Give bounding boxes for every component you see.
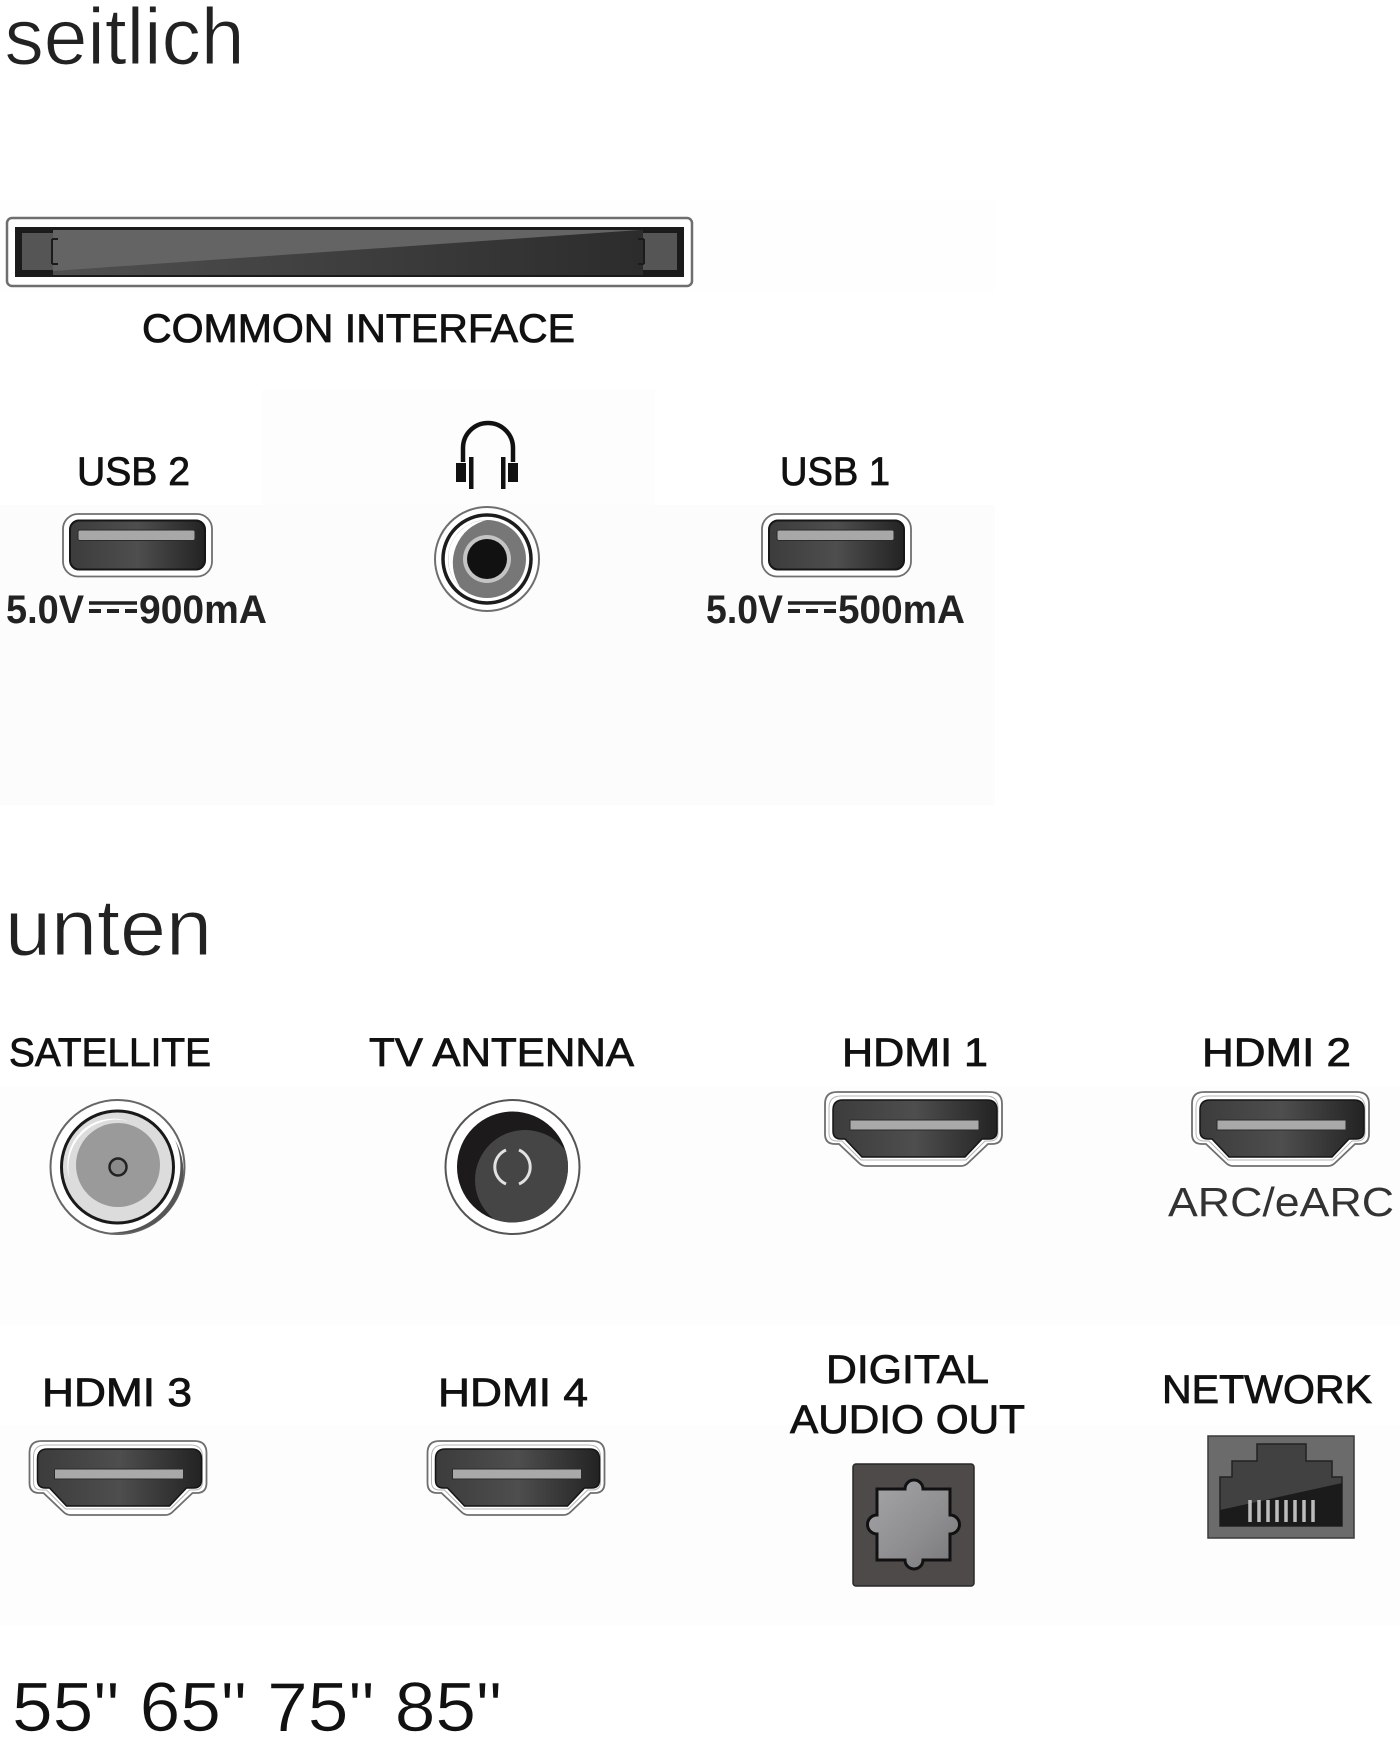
label: USB 1: USB 1 (780, 450, 890, 494)
icon: audio jack (435, 507, 539, 611)
label: HDMI 4: HDMI 4 (438, 1371, 588, 1415)
label: digital audio out: DIGITAL (826, 1348, 989, 1392)
panel: network (1162, 1368, 1372, 1538)
icon: common interface slot (7, 218, 692, 286)
label: HDMI 1: HDMI 1 (842, 1031, 988, 1075)
icon: satellite connector (50, 1100, 184, 1234)
icon: HDMI 2 port (1192, 1092, 1369, 1166)
label: USB 2 power rating (6, 588, 267, 632)
label: USB 1 power rating (706, 588, 965, 632)
heading: unten: unten (5, 883, 212, 972)
label: USB 1 power rating: 500mA (838, 588, 965, 632)
panel: satellite (9, 1031, 211, 1234)
label: network: NETWORK (1162, 1368, 1372, 1412)
label: USB 2 power rating: 5.0V (6, 588, 84, 632)
label: USB 1 power rating: 5.0V (706, 588, 783, 632)
icon: HDMI 4 port (428, 1441, 604, 1515)
label: digital audio out (790, 1348, 1025, 1442)
icon: HDMI 3 port (30, 1441, 206, 1515)
label: digital audio out: AUDIO OUT (790, 1398, 1025, 1442)
label: common interface: COMMON INTERFACE (142, 307, 575, 351)
icon: headphones (456, 423, 518, 489)
icon: USB 2 port (63, 514, 212, 576)
label: HDMI 2: HDMI 2 (1202, 1031, 1351, 1075)
panel: digital audio out (790, 1348, 1025, 1586)
label: ARC/eARC: ARC/eARC (1168, 1179, 1394, 1225)
panel: USB 2 (6, 450, 267, 632)
icon: optical port (853, 1464, 974, 1586)
panel: HDMI 1 (825, 1031, 1002, 1166)
icon: HDMI 1 port (825, 1092, 1002, 1166)
label: HDMI 3: HDMI 3 (42, 1371, 192, 1415)
panel: HDMI 2 (1168, 1031, 1394, 1225)
panel: HDMI 4 (428, 1371, 604, 1515)
icon: antenna connector (446, 1100, 580, 1234)
panel: USB 1 (706, 450, 965, 632)
label: USB 2 power rating: 900mA (139, 588, 267, 632)
panel: HDMI 3 (30, 1371, 206, 1515)
icon: USB 1 port (762, 514, 911, 576)
panel: TV antenna (369, 1031, 635, 1234)
panel: headphone jack (435, 423, 539, 611)
icon: RJ45 port (1208, 1436, 1354, 1538)
label: USB 2: USB 2 (77, 450, 190, 494)
label: TV antenna: TV ANTENNA (369, 1031, 635, 1075)
panel: common interface (7, 218, 692, 351)
label: satellite: SATELLITE (9, 1031, 211, 1075)
